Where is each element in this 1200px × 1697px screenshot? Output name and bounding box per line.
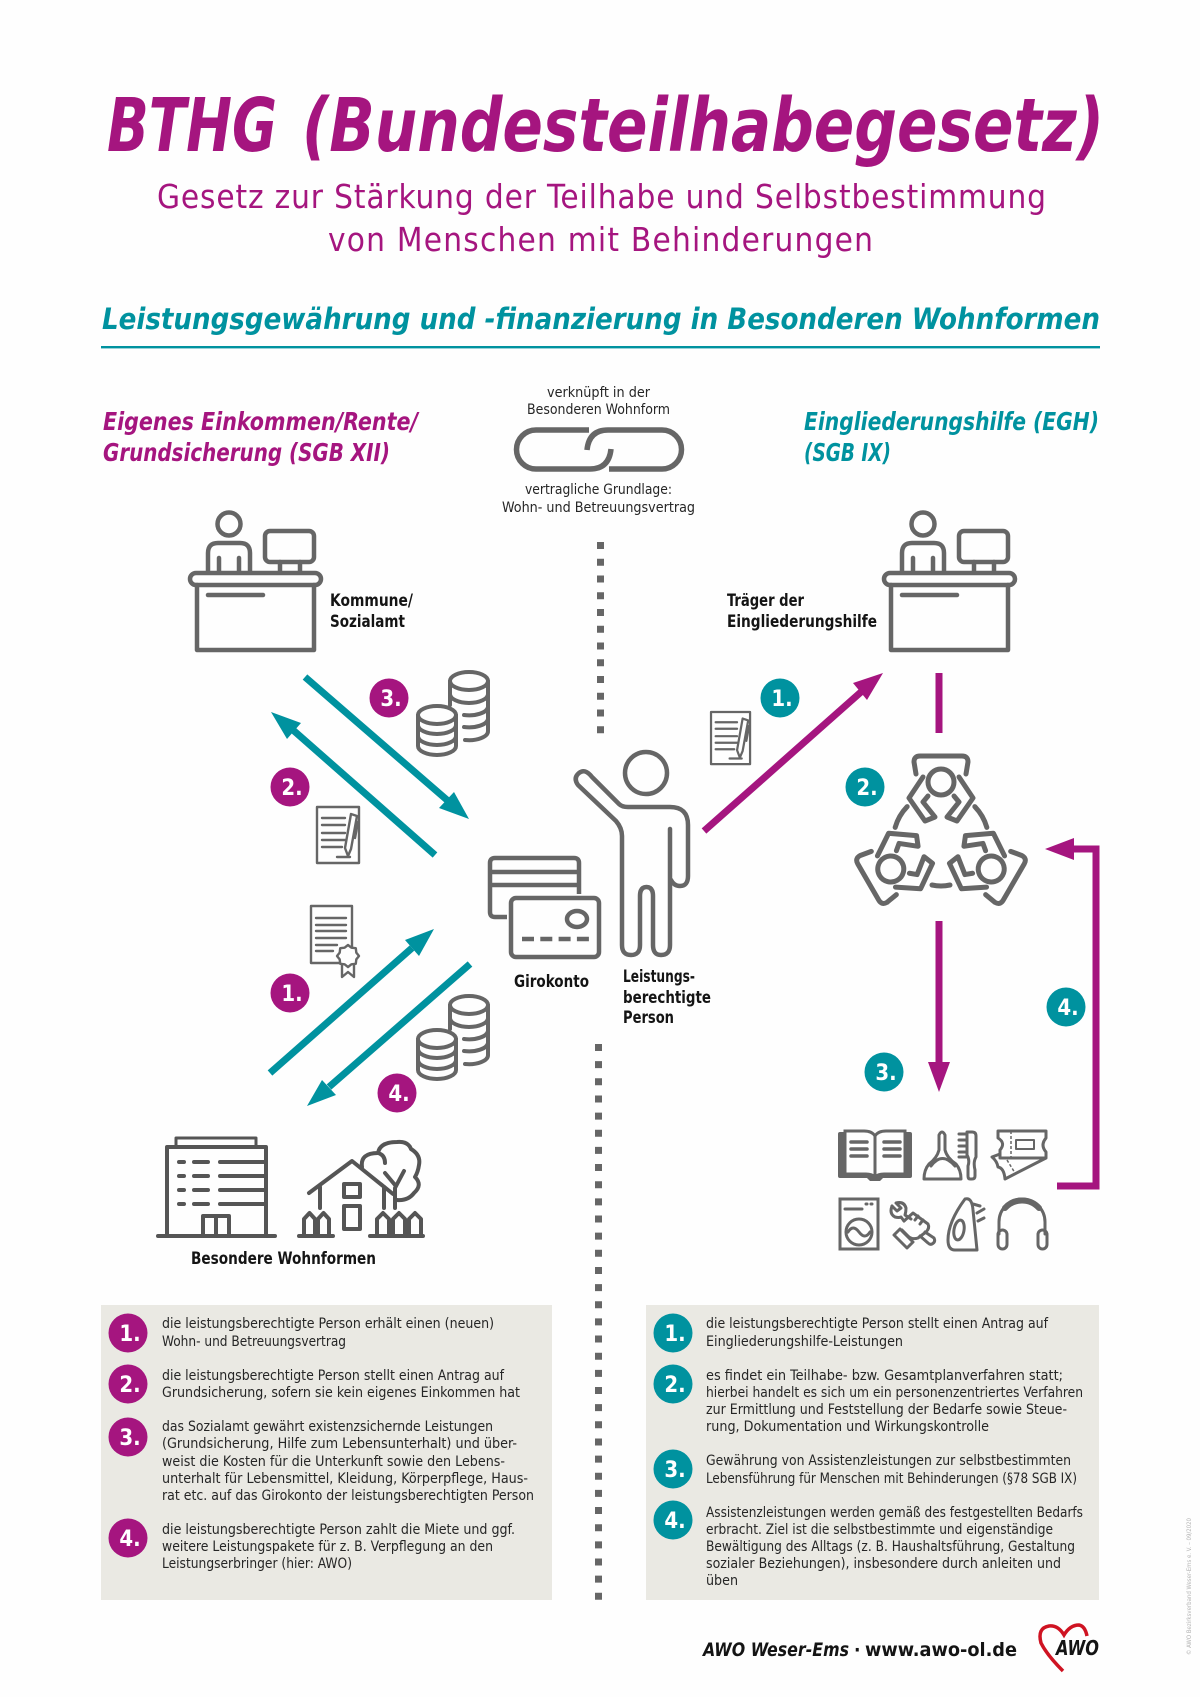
logo: AWO heart: AWO	[1054, 1636, 1099, 1660]
heading: right column: (SGB IX)	[804, 438, 891, 467]
connector: desk to meeting	[936, 673, 942, 733]
heading: left column: Eigenes Einkommen/Rente/	[103, 407, 420, 436]
label: Leistungsberechtigte Person: berechtigte	[623, 988, 711, 1007]
arrow: left 1	[270, 929, 434, 1073]
title: BTHG	[107, 83, 277, 169]
item 3: das Sozialamt gewährt existenzsichernde Leistungen	[162, 1419, 493, 1435]
arrow: left 4	[307, 964, 470, 1106]
text: linked in housing form	[527, 385, 670, 418]
label: Kommune/Sozialamt	[330, 591, 414, 631]
item 1: Wohn- und Betreuungsvertrag	[162, 1334, 346, 1350]
item 4: üben	[706, 1573, 738, 1589]
icon: application form right	[711, 712, 750, 764]
badge: right diagram 3	[864, 1052, 904, 1092]
footer text: AWO Weser-Ems	[701, 1639, 849, 1661]
item 1: die leistungsberechtigte Person stellt einen Antrag auf	[706, 1316, 1049, 1332]
text: linked in housing form: Besonderen Wohnform	[527, 402, 670, 418]
label: Besondere Wohnformen: Besondere Wohnformen	[191, 1249, 376, 1268]
panel: right explanations	[646, 1305, 1099, 1600]
item 4	[654, 1500, 1083, 1589]
badge: right diagram 3: 3.	[875, 1061, 897, 1086]
badge: right diagram 2	[846, 768, 884, 806]
label: Leistungsberechtigte Person: Leistungs-	[623, 967, 695, 986]
arrow: left 2	[271, 712, 435, 855]
item 1: 1.	[119, 1322, 141, 1347]
item 3: 3.	[664, 1458, 686, 1483]
text: contractual basis: vertragliche Grundlage:	[525, 482, 672, 498]
icon: wrench in hand	[891, 1203, 935, 1248]
copyright note: © AWO Bezirksverband Weser-Ems e. V. – 09/2020	[1185, 1518, 1193, 1655]
item 2	[654, 1364, 1083, 1435]
heading: right column	[804, 407, 1099, 467]
label: Kommune/Sozialamt: Sozialamt	[330, 612, 405, 631]
item 2: es findet ein Teilhabe- bzw. Gesamtplanverfahren statt;	[706, 1368, 1063, 1384]
item 1	[108, 1314, 494, 1352]
icon: office desk right	[884, 512, 1015, 650]
item 2	[108, 1364, 520, 1404]
dotted divider top	[597, 542, 604, 734]
text: contractual basis: Wohn- und Betreuungsvertrag	[502, 500, 695, 516]
badge: left diagram 3	[370, 678, 408, 718]
item 1: Eingliederungshilfe-Leistungen	[706, 1334, 903, 1350]
badge: right diagram 2: 2.	[856, 776, 878, 801]
label: Leistungsberechtigte Person: Person	[623, 1008, 674, 1027]
icon: coins top	[418, 672, 488, 755]
icon: contract certificate	[311, 906, 359, 977]
badge: left diagram 1	[270, 974, 310, 1012]
icon: tickets	[992, 1131, 1046, 1179]
badge: right diagram 1: 1.	[771, 687, 793, 712]
section heading: Leistungsgewährung und -finanzierung in Besonderen Wohnformen	[102, 302, 1100, 336]
item 4: Bewältigung des Alltags (z. B. Haushaltsführung, Gestaltung	[706, 1539, 1075, 1555]
footer text	[701, 1639, 1017, 1661]
item 2: Grundsicherung, sofern sie kein eigenes Einkommen hat	[162, 1385, 520, 1401]
item 3: Gewährung von Assistenzleistungen zur selbstbestimmten	[706, 1453, 1071, 1469]
item 4: 4.	[664, 1509, 686, 1534]
item 1: die leistungsberechtigte Person erhält einen (neuen)	[162, 1316, 494, 1332]
arrow: right 4	[1045, 838, 1096, 1186]
item 2: hierbei handelt es sich um ein personenzentriertes Verfahren	[706, 1385, 1083, 1401]
item 1	[654, 1314, 1049, 1352]
badge: right diagram 1	[760, 678, 800, 718]
item 3: Lebensführung für Menschen mit Behinderungen (§78 SGB IX)	[706, 1471, 1077, 1487]
item 2: 2.	[664, 1373, 686, 1398]
item 3: rat etc. auf das Girokonto der leistungsberechtigten Person	[162, 1488, 534, 1504]
icon: person	[576, 752, 688, 955]
item 3: weist die Kosten für die Unterkunft sowie den Lebens-	[162, 1454, 505, 1470]
heading: left column: Grundsicherung (SGB XII)	[103, 438, 390, 467]
footer text: ·	[854, 1639, 860, 1661]
item 4: die leistungsberechtigte Person zahlt die Miete und ggf.	[162, 1522, 515, 1538]
label: Kommune/Sozialamt: Kommune/	[330, 591, 414, 610]
icon: bank cards	[490, 858, 599, 957]
badge: left diagram 4: 4.	[388, 1082, 410, 1107]
badge: left diagram 4	[378, 1074, 416, 1112]
heading: right column: Eingliederungshilfe (EGH)	[804, 407, 1099, 436]
item 4: sozialer Beziehungen), insbesondere durch anleiten und	[706, 1556, 1061, 1572]
item 3: unterhalt für Lebensmittel, Kleidung, Körperpflege, Haus-	[162, 1471, 528, 1487]
icon: apartment building	[158, 1138, 275, 1236]
item 3: (Grundsicherung, Hilfe zum Lebensunterhalt) und über-	[162, 1436, 517, 1452]
badge: left diagram 3: 3.	[380, 687, 402, 712]
icon: meeting of three people	[852, 756, 1030, 910]
item 4: Leistungserbringer (hier: AWO)	[162, 1556, 352, 1572]
item 4: erbracht. Ziel ist die selbstbestimmte und eigenständige	[706, 1522, 1053, 1538]
arrow: right 3	[928, 921, 950, 1092]
item 2: zur Ermittlung und Feststellung der Bedarfe sowie Steue-	[706, 1402, 1067, 1418]
icon: headphones	[998, 1199, 1047, 1249]
footer text: www.awo-ol.de	[865, 1639, 1017, 1661]
dotted divider bottom	[595, 1044, 602, 1600]
item 2: rung, Dokumentation und Wirkungskontrolle	[706, 1419, 989, 1435]
label: Leistungsberechtigte Person	[623, 967, 711, 1027]
title: (Bundesteilhabegesetz)	[302, 83, 1104, 169]
icon: application form left	[317, 807, 359, 863]
arrow: right 1	[704, 673, 883, 831]
icon: iron	[948, 1199, 984, 1250]
badge: left diagram 2: 2.	[281, 776, 303, 801]
text: contractual basis	[502, 482, 695, 516]
item 3: 3.	[119, 1426, 141, 1451]
text: linked in housing form: verknüpft in der	[547, 385, 651, 401]
item 3	[108, 1418, 534, 1504]
label: Träger der Eingliederungshilfe	[727, 591, 877, 631]
label: Träger der Eingliederungshilfe: Eingliederungshilfe	[727, 612, 877, 631]
subtitle	[157, 177, 1046, 259]
panel: left explanations	[101, 1305, 552, 1600]
subtitle: Gesetz zur Stärkung der Teilhabe und Selbstbestimmung	[157, 177, 1046, 216]
label: Girokonto: Girokonto	[514, 972, 589, 991]
item 4	[108, 1518, 515, 1572]
badge: left diagram 2	[270, 768, 310, 806]
heading: left column	[103, 407, 420, 467]
item 4: 4.	[119, 1527, 141, 1552]
item 4: weitere Leistungspakete für z. B. Verpflegung an den	[162, 1539, 493, 1555]
badge: right diagram 4	[1046, 988, 1086, 1026]
logo: AWO heart	[1040, 1625, 1099, 1671]
icon: washing machine	[840, 1199, 878, 1249]
item 2: 2.	[119, 1373, 141, 1398]
icon: coins bottom	[418, 996, 488, 1079]
icon: office desk left	[190, 512, 321, 650]
item 2: die leistungsberechtigte Person stellt einen Antrag auf	[162, 1368, 505, 1384]
icon: house with tree	[299, 1142, 423, 1236]
badge: left diagram 1: 1.	[281, 982, 303, 1007]
label: Träger der Eingliederungshilfe: Träger der	[727, 591, 805, 610]
arrow: left 3	[305, 677, 469, 819]
item 3	[654, 1450, 1077, 1488]
icon: dustpan and brush	[924, 1132, 976, 1179]
badge: right diagram 4: 4.	[1057, 996, 1079, 1021]
icon: chain link	[516, 430, 682, 469]
item 4: Assistenzleistungen werden gemäß des festgestellten Bedarfs	[706, 1505, 1083, 1521]
subtitle: von Menschen mit Behinderungen	[328, 220, 873, 259]
icon: book	[838, 1131, 912, 1181]
item 1: 1.	[664, 1322, 686, 1347]
